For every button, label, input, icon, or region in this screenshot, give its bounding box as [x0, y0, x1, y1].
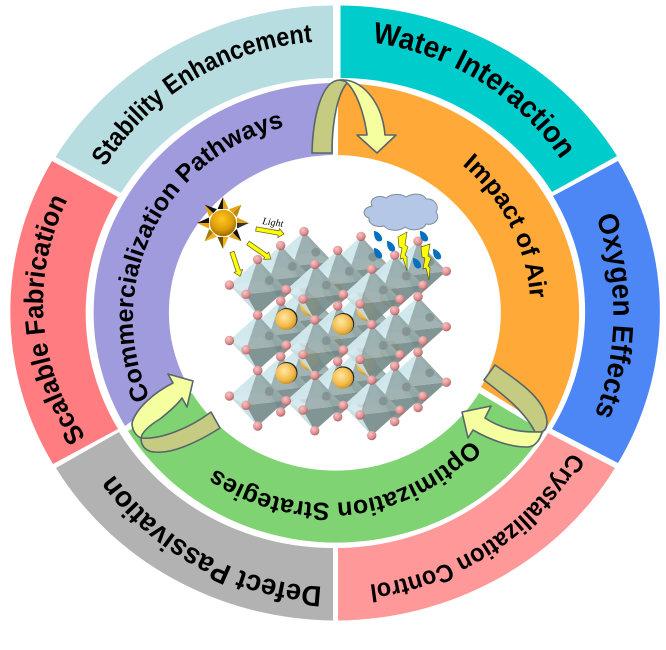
light rays	[228, 224, 285, 278]
segment: Optimization Strategies	[128, 393, 544, 543]
label: Light: Light	[261, 216, 284, 230]
segment: Scalable Fabrication: Scalable Fabrication	[24, 196, 84, 444]
segment: Commercialization Pathways	[94, 83, 333, 426]
segment: Stability Enhancement	[56, 6, 333, 193]
icon: cloud	[364, 194, 438, 230]
segment: Commercialization Pathways: Commercialization Pathways	[118, 116, 282, 402]
perovskite crystal lattice	[225, 227, 451, 440]
segment: Crystallization Control: Crystallization Control	[370, 456, 583, 602]
segment: Optimization Strategies: Optimization Strategies	[210, 443, 479, 520]
segment: Impact of Air: Impact of Air	[463, 153, 547, 298]
arrow: left curved arrow from Optimization to Commercialization	[132, 374, 220, 452]
segment: Oxygen Effects	[552, 161, 660, 463]
segment: Water Interaction: Water Interaction	[376, 22, 572, 158]
segment: Crystallization Control	[338, 433, 615, 620]
segment: Defect Passivation	[56, 432, 333, 620]
arrow: top curved arrow from Commercialization to Impact of Air	[312, 80, 396, 153]
segment: Defect Passivation: Defect Passivation	[104, 476, 320, 606]
segment: Scalable Fabrication	[10, 161, 118, 464]
segment: Water Interaction	[340, 6, 617, 192]
segment: Stability Enhancement: Stability Enhancement	[92, 25, 312, 164]
icon: rain drops	[374, 231, 441, 268]
arrow: right curved arrow from Impact of Air to Optimization	[462, 365, 547, 447]
icon: lightning bolts	[398, 232, 431, 280]
segment: Oxygen Effects: Oxygen Effects	[596, 214, 634, 418]
icon: sun	[197, 197, 249, 249]
segment: Impact of Air	[338, 84, 580, 428]
inner ring	[94, 83, 580, 543]
